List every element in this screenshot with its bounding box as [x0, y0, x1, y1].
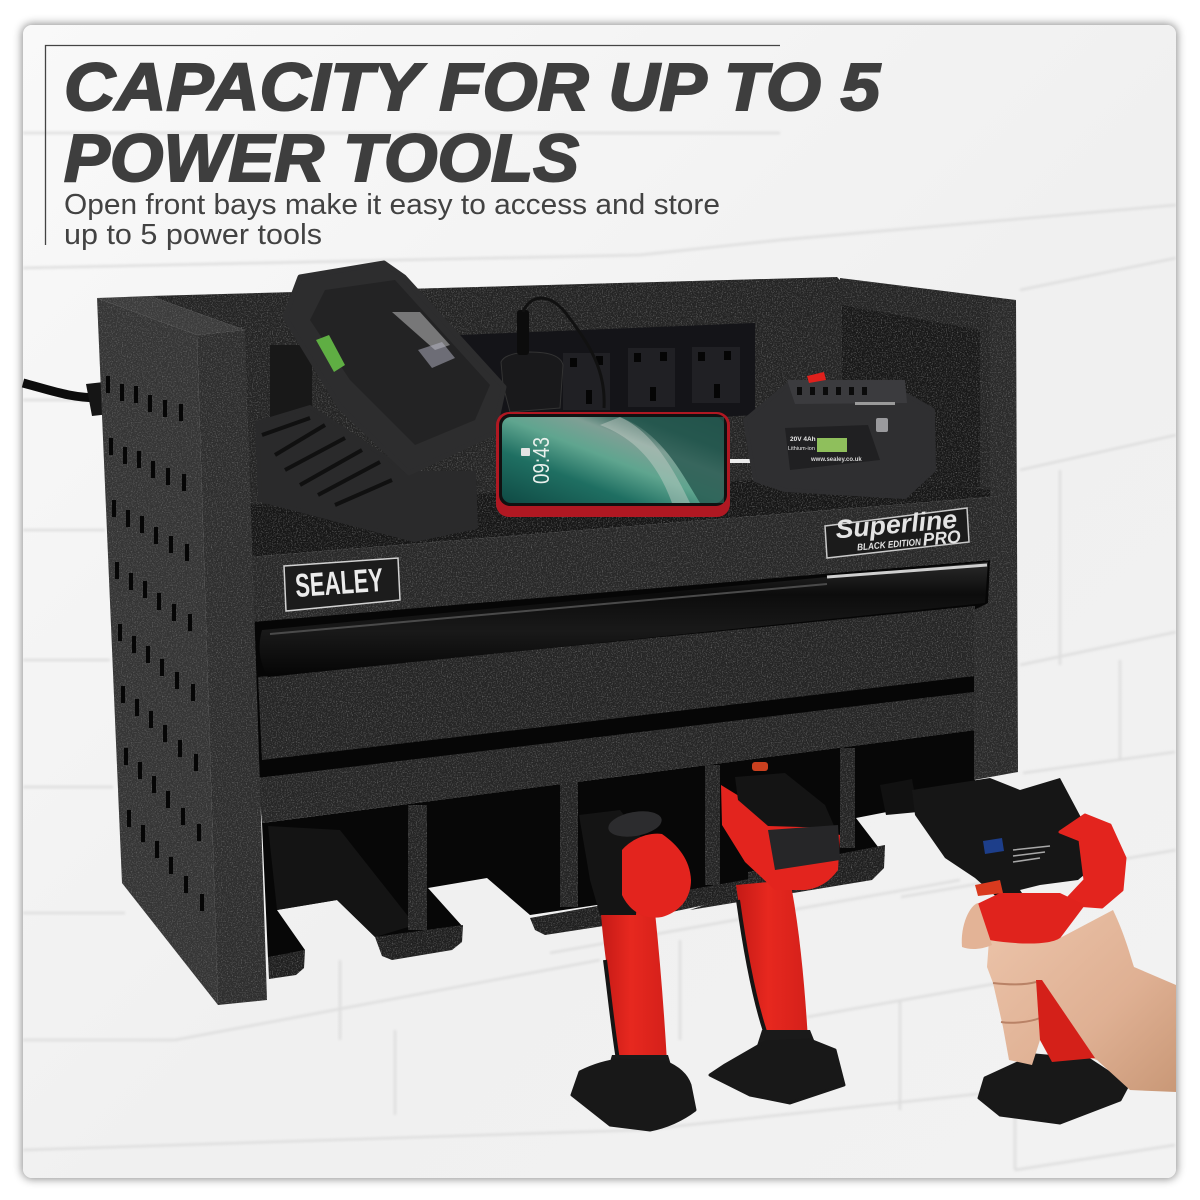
lower rail	[258, 688, 976, 823]
title: POWER TOOLS	[64, 121, 579, 196]
phone: 09:43	[528, 437, 554, 484]
tool grip between fingers and palm	[1036, 980, 1095, 1062]
Superline Pro badge: Superline	[834, 504, 958, 544]
right front post	[974, 300, 1018, 780]
drawer front	[258, 606, 975, 760]
Superline Pro badge: PRO	[922, 527, 961, 550]
phone	[496, 412, 730, 517]
power tool 2	[710, 762, 844, 1103]
bay cradle surface	[268, 826, 415, 937]
usb charging cable	[730, 461, 778, 473]
bay front lips	[268, 845, 885, 979]
title	[64, 50, 882, 196]
20V battery: Lithium-ion	[788, 446, 815, 452]
SEALEY badge: SEALEY	[294, 561, 384, 604]
power tool 3 held in hand	[880, 778, 1128, 1123]
description text: Open front bays make it easy to access and store	[64, 189, 720, 221]
description text	[64, 189, 720, 251]
description text: up to 5 power tools	[64, 219, 322, 251]
back panel	[150, 277, 842, 510]
20V battery	[745, 372, 934, 497]
SEALEY badge	[284, 558, 400, 611]
large battery on charger	[285, 263, 504, 473]
Superline Pro badge: BLACK EDITION	[857, 537, 922, 554]
right inner side panel	[840, 278, 1016, 495]
left panel top edge	[97, 296, 245, 335]
power tool 1	[572, 807, 695, 1130]
bay dividers	[408, 748, 855, 930]
plug and cable	[501, 298, 604, 412]
hand gripping tool	[962, 903, 1176, 1092]
20V battery: www.sealey.co.uk	[810, 457, 862, 463]
Superline Pro badge	[825, 504, 969, 558]
drawer handle	[260, 562, 988, 677]
top front panel	[250, 497, 990, 622]
charger base	[257, 345, 476, 540]
power strip	[459, 323, 755, 430]
heading frame lines	[46, 46, 780, 245]
left perforated side panel	[97, 298, 218, 1005]
title: CAPACITY FOR UP TO 5	[64, 50, 882, 125]
power cable	[23, 382, 110, 416]
shelf floor	[250, 476, 990, 557]
wall cabinet	[97, 277, 1018, 1005]
left front post	[197, 330, 267, 1005]
20V battery: 20V 4Ah	[790, 436, 816, 443]
drawer recess	[252, 560, 990, 778]
bay interior	[262, 730, 975, 958]
